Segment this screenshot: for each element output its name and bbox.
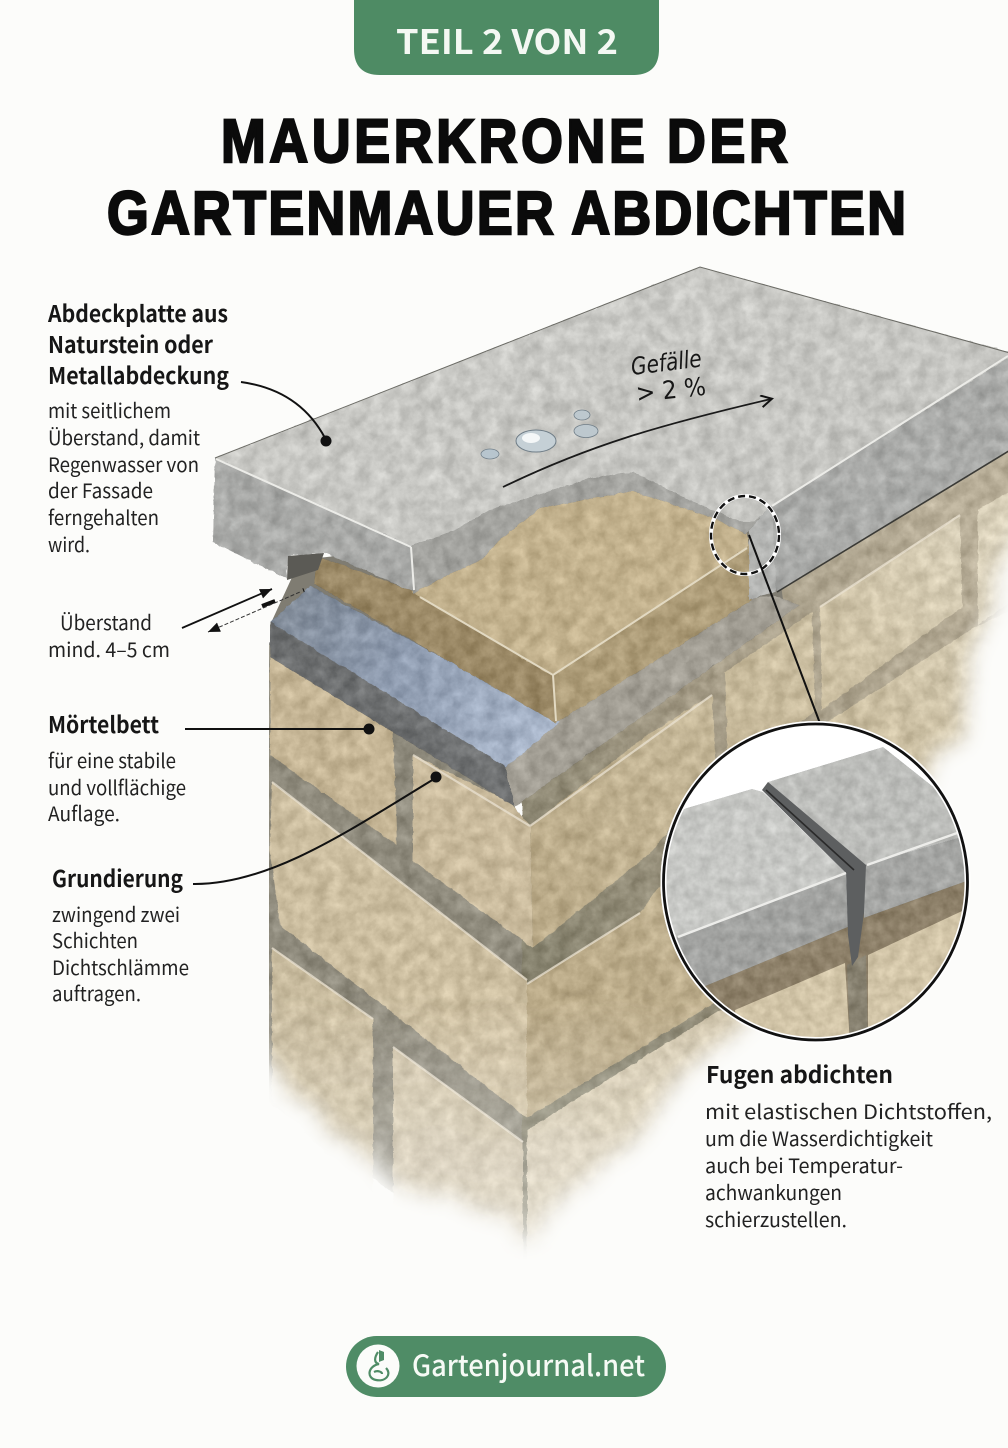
slab: right face (745, 352, 1008, 600)
water drops (481, 410, 598, 459)
slope label: Gefälle (629, 345, 703, 381)
text block: joint sealing: achwankungen (705, 1177, 842, 1206)
text block: capstone: ferngehalten (48, 502, 159, 531)
icon: plant pot logo (356, 1344, 400, 1388)
text block: joint sealing (705, 1056, 992, 1233)
badge: part 2 of 2 (354, 0, 659, 75)
text block: joint sealing: mit elastischen Dichtstoffen, (705, 1096, 992, 1125)
leader line to inset (749, 535, 821, 726)
text block: capstone: Überstand, damit (48, 422, 200, 451)
brick wall (265, 420, 1008, 1300)
text block: joint sealing: auch bei Temperatur- (705, 1150, 903, 1179)
text block: primer: Dichtschlämme (52, 952, 189, 981)
inset: stone highlights (678, 832, 960, 937)
grey band on right of waterproofing (505, 596, 800, 807)
text block: overhang: Überstand (60, 607, 152, 636)
callout line: primer (193, 772, 442, 884)
slab: left face (213, 458, 414, 592)
wall: brick edge highlights (272, 515, 960, 1142)
title (107, 108, 906, 248)
text block: mortar bed: und vollflächige (48, 772, 186, 801)
inset: sealant (762, 782, 866, 966)
text block: primer: zwingend zwei (52, 899, 180, 928)
badge: part 2 of 2: TEIL 2 VON 2 (396, 15, 618, 64)
text block: primer (52, 860, 189, 1007)
slope arrow (503, 399, 771, 487)
text block: mortar bed: Mörtelbett (48, 706, 159, 740)
footer logo pill (346, 1336, 666, 1397)
inset: wall below (705, 882, 964, 1037)
text block: primer: Schichten (52, 925, 138, 954)
slab: top surface (215, 267, 1008, 546)
slab: notch shadow (287, 553, 324, 580)
text block: primer: Grundierung (52, 860, 183, 894)
capstone slab (213, 267, 1008, 600)
mortar bed (314, 486, 751, 723)
text block: capstone (47, 295, 229, 558)
slab: broken edge face (411, 468, 760, 594)
text block: joint sealing: schierzustellen. (705, 1204, 847, 1233)
overhang dimension arrows (182, 589, 304, 632)
inset: right coping stone (768, 747, 975, 918)
slab: underside shadow line (777, 449, 1008, 592)
callout line: mortar bed (185, 724, 374, 734)
text block: capstone: Regenwasser von (48, 449, 199, 478)
text block: mortar bed: für eine stabile (48, 745, 176, 774)
slope label (629, 345, 707, 408)
text block: mortar bed (48, 706, 186, 827)
seam detail marker: dashed circle (711, 496, 779, 574)
slope label: > 2 % (635, 372, 707, 408)
text block: joint sealing: um die Wasserdichtigkeit (705, 1123, 933, 1152)
waterproof layer: blue slurry coat (270, 586, 560, 806)
callout line: capstone (241, 382, 332, 446)
inset: left coping stone (666, 789, 848, 986)
text block: capstone: wird. (48, 529, 90, 558)
footer logo pill: Gartenjournal.net (412, 1343, 645, 1385)
text block: primer: auftragen. (52, 978, 141, 1007)
text block: overhang: mind. 4–5 cm (48, 634, 170, 663)
text block: capstone: Abdeckplatte aus (47, 295, 228, 329)
text block: mortar bed: Auflage. (48, 798, 120, 827)
text block: capstone: mit seitlichem (48, 395, 171, 424)
text block: capstone: Naturstein oder (48, 326, 214, 360)
title: MAUERKRONE DER (221, 108, 788, 176)
text block: joint sealing: Fugen abdichten (706, 1056, 893, 1090)
text block: capstone: Metallabdeckung (48, 357, 229, 391)
inset: joint sealing detail (655, 721, 975, 1045)
slab: outline (215, 267, 1008, 458)
slab: edge highlight (216, 356, 1008, 590)
title: GARTENMAUER ABDICHTEN (107, 180, 906, 248)
underlay: shadow behind upper layers (270, 500, 785, 806)
text block: overhang (48, 607, 170, 663)
mortar bed: edge highlight (420, 548, 747, 721)
text block: capstone: der Fassade (48, 475, 153, 504)
illustration: wall crown cross-section (213, 267, 1008, 1300)
